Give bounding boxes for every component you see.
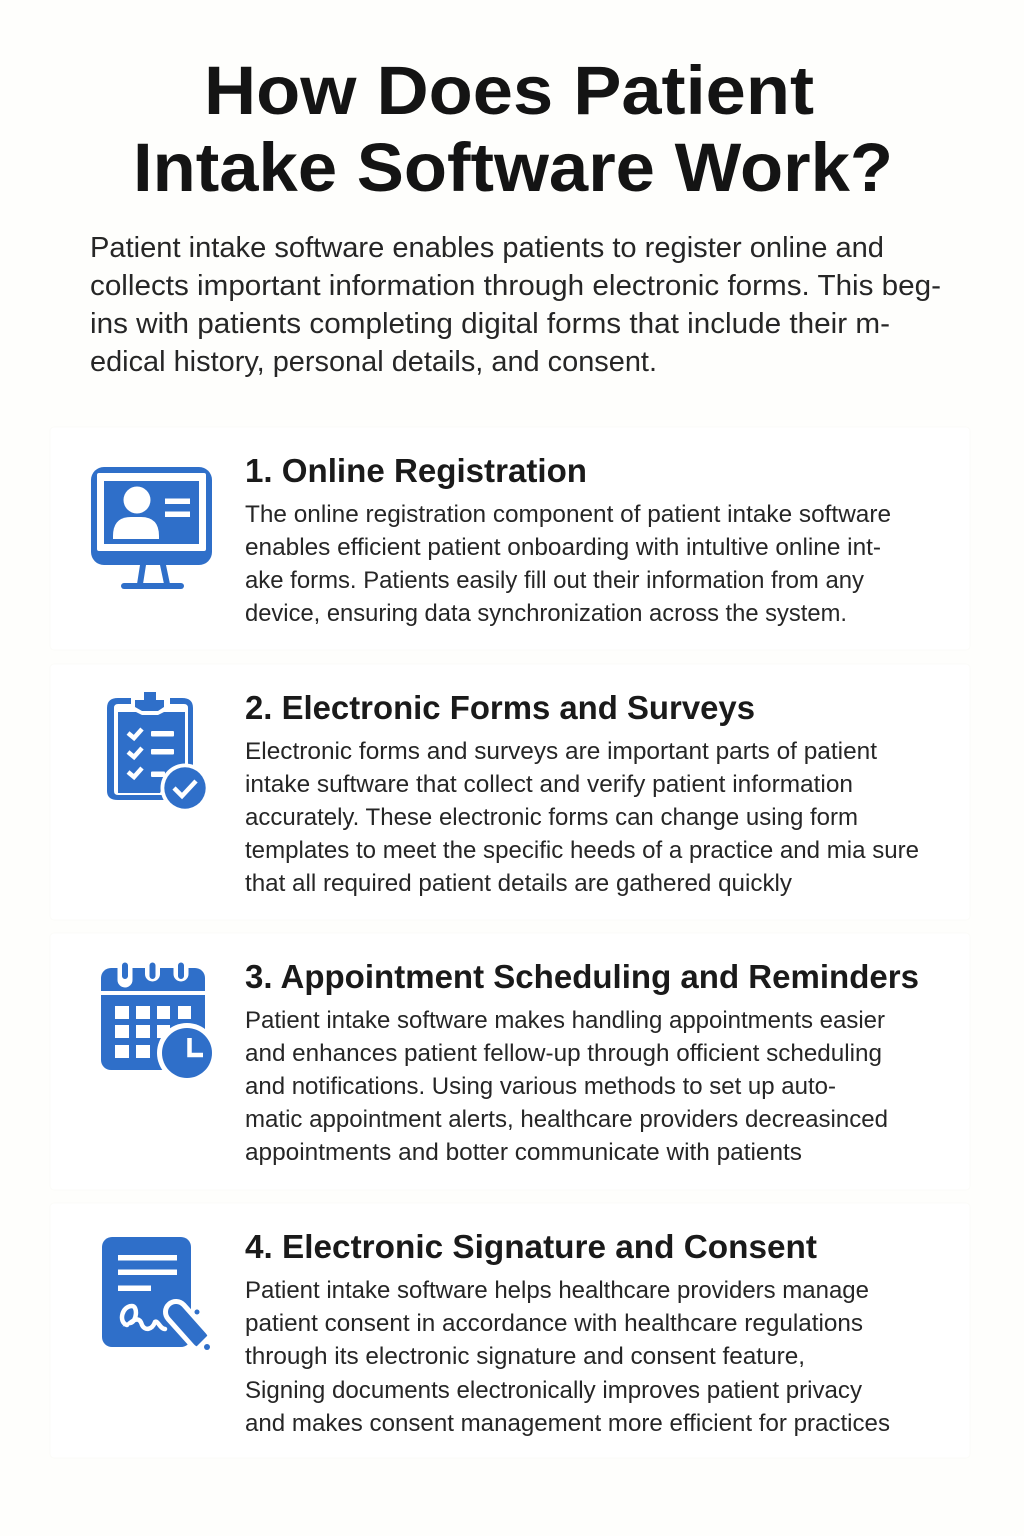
intro paragraph: ins with patients completing digital forms that include their m- bbox=[90, 308, 890, 340]
heading: 1. Online Registration bbox=[245, 452, 587, 489]
body text: Signing documents electronically improves patient privacy bbox=[245, 1377, 862, 1404]
intro paragraph: collects important information through electronic forms. This beg- bbox=[90, 270, 941, 302]
body text: device, ensuring data synchronization across the system. bbox=[245, 600, 847, 627]
body text: and notifications. Using various methods to set up auto- bbox=[245, 1073, 836, 1100]
body text: through its electronic signature and consent feature, bbox=[245, 1343, 805, 1370]
body text: accurately. These electronic forms can change using form bbox=[245, 804, 858, 831]
body text: appointments and botter communicate with patients bbox=[245, 1139, 802, 1166]
body text: ake forms. Patients easily fill out their information from any bbox=[245, 567, 864, 594]
body text: that all required patient details are gathered quickly bbox=[245, 870, 792, 897]
title bbox=[133, 52, 893, 206]
body text: enables efficient patient onboarding with intultive online int- bbox=[245, 534, 881, 561]
panel: electronic signature and consent bbox=[50, 1203, 970, 1458]
body text: The online registration component of patient intake software bbox=[245, 501, 891, 528]
panel: appointment scheduling and reminders bbox=[50, 933, 970, 1190]
body text: Patient intake software helps healthcare providers manage bbox=[245, 1277, 869, 1304]
panel: electronic forms and surveys bbox=[50, 664, 970, 920]
title: How Does Patient bbox=[204, 52, 814, 129]
intro paragraph: Patient intake software enables patients to register online and bbox=[90, 232, 884, 264]
intro paragraph bbox=[90, 232, 941, 378]
icon: clipboard checklist bbox=[107, 692, 210, 812]
body text bbox=[245, 738, 919, 897]
body text: intake suftware that collect and verify patient information bbox=[245, 771, 853, 798]
intro paragraph: edical history, personal details, and consent. bbox=[90, 346, 657, 378]
body text: Electronic forms and surveys are important parts of patient bbox=[245, 738, 877, 765]
body text: Patient intake software makes handling appointments easier bbox=[245, 1007, 885, 1034]
body text bbox=[245, 1007, 888, 1166]
body text: matic appointment alerts, healthcare providers decreasinced bbox=[245, 1106, 888, 1133]
body text: and makes consent management more efficient for practices bbox=[245, 1410, 890, 1437]
heading: 4. Electronic Signature and Consent bbox=[245, 1228, 817, 1265]
icon: computer monitor with patient profile bbox=[91, 467, 212, 589]
body text: and enhances patient fellow-up through officient scheduling bbox=[245, 1040, 882, 1067]
panel: online registration bbox=[50, 427, 970, 650]
body text: patient consent in accordance with healthcare regulations bbox=[245, 1310, 863, 1337]
body text: templates to meet the specific heeds of a practice and mia sure bbox=[245, 837, 919, 864]
body text bbox=[245, 1277, 890, 1437]
heading: 2. Electronic Forms and Surveys bbox=[245, 689, 755, 726]
title: Intake Software Work? bbox=[133, 129, 893, 206]
heading: 3. Appointment Scheduling and Reminders bbox=[245, 958, 919, 995]
body text bbox=[245, 501, 891, 627]
icon: signed document with pen bbox=[102, 1237, 222, 1360]
icon: calendar with clock bbox=[101, 963, 217, 1083]
